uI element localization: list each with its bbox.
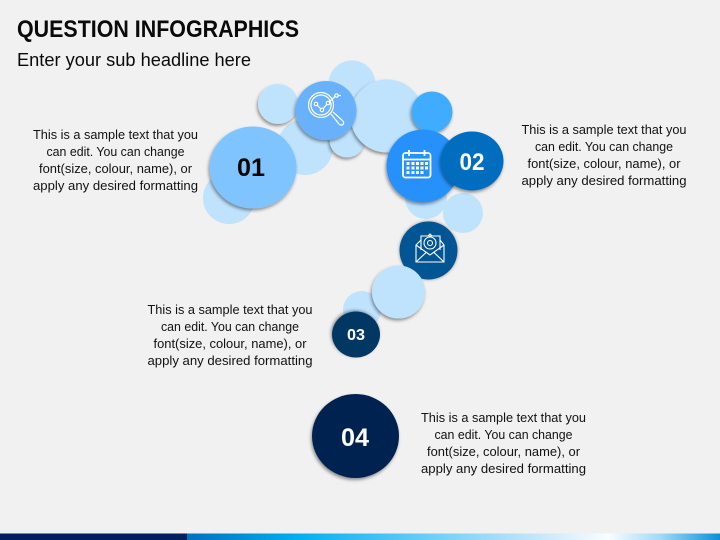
text block 03: font(size, colour, name), or bbox=[154, 336, 307, 351]
light bubble: top bbox=[328, 60, 376, 108]
light bubble: small left bbox=[258, 84, 298, 124]
badge 01: 01 bbox=[237, 154, 265, 182]
badge 02: 02 bbox=[460, 149, 484, 176]
text block 02: apply any desired formatting bbox=[522, 173, 686, 188]
text block 04: can edit. You can change bbox=[434, 427, 572, 442]
text block 02 bbox=[522, 122, 686, 188]
bright blue bubble bbox=[412, 92, 452, 132]
text block 01: apply any desired formatting bbox=[33, 178, 198, 193]
text block 03: This is a sample text that you bbox=[148, 302, 312, 317]
light bubble: between envelope and 03 bbox=[372, 266, 425, 318]
question mark of circles bbox=[203, 60, 504, 478]
light bubble: under search icon bbox=[330, 122, 364, 158]
icon: envelope bbox=[400, 222, 458, 280]
light bubble: behind 01 lower bbox=[203, 172, 255, 224]
text block 02: font(size, colour, name), or bbox=[528, 156, 681, 171]
text block 02: can edit. You can change bbox=[535, 139, 673, 154]
text block 04 bbox=[421, 410, 586, 476]
text block 03 bbox=[148, 302, 312, 368]
footer bar bbox=[0, 534, 720, 540]
text block 04: apply any desired formatting bbox=[421, 461, 586, 476]
sub headline: Enter your sub headline here bbox=[17, 50, 251, 70]
icon: calendar bbox=[386, 130, 460, 202]
badge 03: 03 bbox=[347, 327, 365, 344]
text block 03: can edit. You can change bbox=[161, 319, 299, 334]
badge 02 bbox=[440, 132, 504, 190]
text block 01: can edit. You can change bbox=[46, 144, 184, 159]
light bubble: behind 01 right bbox=[277, 119, 333, 175]
light bubble: below 02 bbox=[443, 193, 483, 233]
badge 01 bbox=[210, 126, 296, 208]
text block 04: This is a sample text that you bbox=[421, 410, 586, 425]
text block 01: This is a sample text that you bbox=[33, 127, 198, 142]
text block 04: font(size, colour, name), or bbox=[427, 444, 581, 459]
light bubble: large bbox=[350, 80, 424, 152]
icon: magnifier with chart bbox=[296, 81, 356, 140]
text block 03: apply any desired formatting bbox=[148, 353, 312, 368]
badge 03 bbox=[332, 312, 380, 358]
badge 04: 04 bbox=[341, 424, 369, 452]
light bubble: small above 03 bbox=[343, 291, 381, 329]
light bubble: below calendar bbox=[405, 177, 447, 219]
text block 02: This is a sample text that you bbox=[522, 122, 686, 137]
text block 01 bbox=[33, 127, 198, 193]
text block 01: font(size, colour, name), or bbox=[39, 161, 193, 176]
badge 04 bbox=[312, 394, 399, 478]
title: QUESTION INFOGRAPHICS bbox=[17, 16, 299, 43]
